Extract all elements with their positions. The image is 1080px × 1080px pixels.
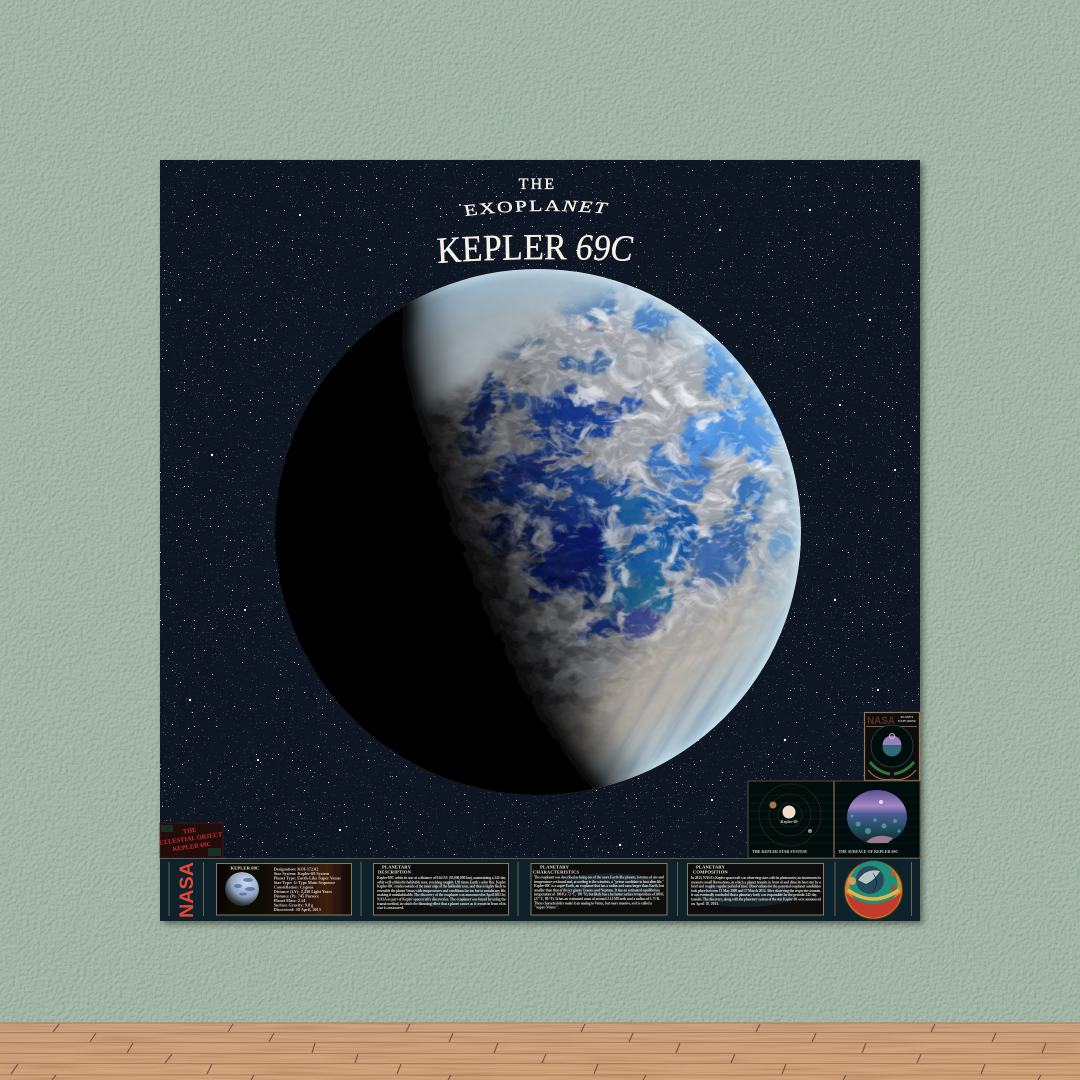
patch caption <box>898 715 917 723</box>
body text: transit method, in which the dimming effect that a planet causes as it crosses in front of its <box>377 902 507 906</box>
title line: EXOPLANET: EXOPLANET <box>463 200 609 216</box>
body text: measure small fluctuations, in which a planet transits in front of and dims its host star by a <box>691 880 821 884</box>
body text: on April 18, 2013. <box>691 902 719 906</box>
limb atmosphere <box>275 269 801 795</box>
body text: "super-Venus". <box>534 906 559 910</box>
patch NASA logo: NASA <box>867 715 895 727</box>
heading: PLANETARY <box>696 864 726 870</box>
planet north haze <box>400 255 640 420</box>
dissolving shadow mottling <box>275 308 636 795</box>
starfield <box>160 160 920 860</box>
column ornaments <box>169 862 912 916</box>
panel: planetary description <box>374 864 508 915</box>
nameplate panel <box>216 864 352 915</box>
southern pale cloud band <box>531 544 800 795</box>
planet facts: Star System: Kepler-69 System <box>274 871 330 876</box>
medallion emblem <box>844 861 902 919</box>
planet c <box>808 829 812 833</box>
body text <box>534 876 665 910</box>
panel: planetary composition <box>688 864 824 915</box>
body text: resemble the planet Venus with temperatures and conditions far too hot to sustain any life, <box>377 889 506 893</box>
heading: DESCRIPTION <box>378 870 412 874</box>
body text: NASA as part of Kepler spacecraft's discoveries. The exoplanet was found by using the <box>377 898 506 902</box>
cloud texture <box>270 260 810 800</box>
label: the celestial object: THE <box>183 827 197 835</box>
patch mini planet <box>882 738 902 756</box>
body text: Kepler-69C is a super-Earth, an exoplanet that has a radius and mass larger than Earth, but <box>534 884 665 888</box>
patch caption: PLANET <box>901 715 914 719</box>
body text: took place between 13 May 2009 and 17 March 2012. After observing the respective transits, <box>691 889 821 893</box>
planet facts: Distance (P): 745 Parsecs <box>274 893 319 898</box>
poster <box>158 159 928 928</box>
body text: making it uninhabitable. The discovery of the exoplanet was announced in April 2013 by <box>377 893 506 897</box>
body text: star is measured. <box>377 906 404 910</box>
caption: surface: THE SURFACE OF KEPLER 69C <box>838 849 898 854</box>
southern streaks <box>480 562 792 795</box>
planet facts: Planet Type: Earth-Like Super Venus <box>274 875 341 880</box>
body text: transits. The discovery, along with the planetary system of the star Kepler-69 were announced <box>691 898 822 902</box>
caption: star system: THE KEPLER STAR SYSTEM <box>752 849 807 854</box>
body text: The exoplanet was described as being one of the more Earth-like planets, in terms of size and <box>534 876 665 880</box>
label: the celestial object <box>158 823 225 858</box>
planet b <box>770 802 776 808</box>
panel: planetary characteristics <box>531 864 667 915</box>
panel: the Kepler star system <box>748 781 834 858</box>
heading: PLANETARY <box>382 864 412 870</box>
patch laurels <box>870 762 914 774</box>
body text <box>377 876 507 910</box>
body text: smaller than that of the ice giants Uranus and Neptune. It has an estimated equilibrium <box>534 888 661 892</box>
planet facts: Star Type: G-Type Main Sequence <box>274 880 335 885</box>
ocean patches <box>449 272 799 643</box>
body text: In 2013, NASA's Kepler spacecraft was observing stars with its photometer, an instrument to <box>691 876 821 880</box>
planet facts: Designation: KOI-172.02 <box>274 866 318 871</box>
patch caption: EXPLORER <box>898 719 917 723</box>
heading: CHARACTERISTICS <box>533 870 580 874</box>
body text: Kepler-69C resides outside of the inner edge of the habitable zone, and thus is highly likely to <box>377 885 506 889</box>
body text: Kepler-69C orbits its star at a distance of 0.64 AU (95,000,000 km), maintaining a 242-day <box>377 876 506 880</box>
body text: orbit well within the habitable zone, receiving roughly 1.91 times Earth's solar flux. Kepler <box>377 880 506 884</box>
body text <box>691 876 822 906</box>
title line: KEPLER 69C: KEPLER 69C <box>437 234 634 264</box>
NASA logo: NASA <box>177 862 198 918</box>
planet Kepler 69c <box>275 269 801 795</box>
planet facts: Distance (LY): 2,430 Light Years <box>274 889 332 894</box>
daylight falloff <box>275 304 728 795</box>
mini planet <box>225 872 259 906</box>
heading <box>378 864 412 874</box>
body text: These characteristics make it an analog to Venus, but more massive, so it is called a <box>534 901 652 905</box>
deep ocean highlights <box>465 295 763 634</box>
body text: (27 °C, 80 °F). It has an estimated mass of around 2.14 MEarth and a radius of 1.71 R. <box>534 897 660 901</box>
terminator shadow <box>275 282 655 795</box>
bottom information band <box>160 858 920 921</box>
heading: COMPOSITION <box>693 870 728 874</box>
heading <box>533 864 580 874</box>
surface scene <box>847 790 907 844</box>
title line: THE: THE <box>519 176 556 193</box>
panel: the surface of Kepler 69c <box>834 781 920 858</box>
planet facts: Discovered: 18 April, 2013 <box>274 907 321 912</box>
mission patch badge <box>864 712 920 780</box>
planet facts: Surface Gravity: 9.8 g <box>274 902 314 907</box>
title <box>437 176 634 264</box>
body text: temperature yet found and, according to the scientists, a "prime candidate to host alien life." <box>534 880 664 884</box>
body text: temperature of -100 K (-73 °C, -101 °F), but likely has a far hotter surface temperature of 300 K <box>534 893 664 897</box>
planet facts <box>274 866 341 912</box>
label: the celestial object: KEPLER 69C <box>172 841 212 853</box>
body text: brief and roughly regular period of time. Observations for the potential exoplanet candidates <box>691 885 822 889</box>
planet facts: Constellation: Cygnus <box>274 884 314 889</box>
wooden floor <box>0 1023 1080 1080</box>
nameplate heading: KEPLER 69C <box>231 866 259 870</box>
body text: it was eventually concluded that a planetary body was responsible for the periodic 242-day <box>691 893 817 897</box>
planet facts: Planet Mass: 2.14 <box>274 898 306 903</box>
label: the celestial object: CELESTIAL OBJECT <box>159 831 223 847</box>
heading: PLANETARY <box>540 864 570 870</box>
fine cloud filaments <box>270 260 810 800</box>
heading <box>693 864 728 874</box>
star Kepler-69 <box>782 806 796 818</box>
medallion planet <box>856 866 884 894</box>
panel: the Kepler star system: Kepler-69 <box>781 819 797 824</box>
